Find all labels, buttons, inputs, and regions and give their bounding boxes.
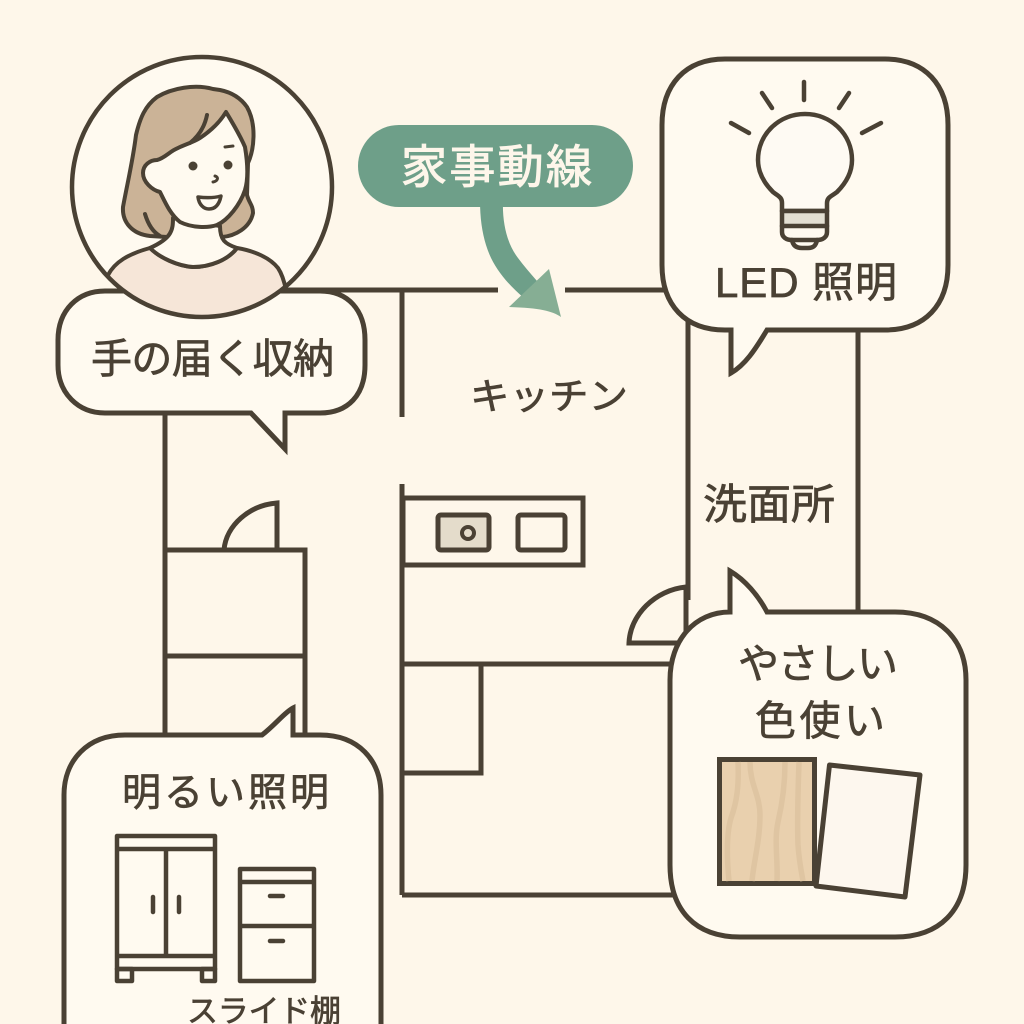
mouth — [198, 196, 221, 209]
kitchen counter — [403, 498, 583, 565]
callout: 明るい照明 — [64, 708, 381, 1024]
icon: drawer cabinet — [240, 869, 314, 981]
room label: kitchen: キッチン — [470, 376, 628, 417]
white swatch — [816, 765, 920, 897]
eyes — [188, 160, 232, 170]
person portrait — [72, 57, 332, 330]
icon: light bulb — [731, 82, 881, 248]
callout: 手の届く収納 — [58, 291, 365, 449]
neck — [150, 218, 237, 267]
shirt — [107, 246, 286, 315]
callout: 手の届く収納: 手の届く収納 — [91, 336, 334, 382]
callout: 明るい照明: 明るい照明 — [122, 772, 329, 815]
callout: LED照明: LED 照明 — [715, 259, 897, 306]
wood swatch — [720, 760, 814, 884]
room label: washroom: 洗面所 — [703, 481, 835, 528]
icon: wardrobe — [117, 836, 215, 981]
sink — [518, 515, 565, 550]
hair strands — [145, 115, 207, 236]
title pill: 家事動線 with arrow: 家事動線 — [401, 141, 592, 193]
callout: やさしい色使い: 色使い — [755, 698, 885, 744]
floor plan walls — [165, 290, 858, 895]
callout: やさしい色使い: やさしい — [738, 641, 898, 687]
nose — [213, 176, 217, 182]
callout: やさしい色使い — [670, 571, 966, 937]
hair — [123, 87, 254, 237]
callout: LED照明 — [662, 59, 948, 373]
stove — [438, 515, 489, 550]
title pill: 家事動線 with arrow — [358, 125, 633, 317]
eyebrow — [225, 146, 233, 147]
face — [143, 112, 247, 227]
